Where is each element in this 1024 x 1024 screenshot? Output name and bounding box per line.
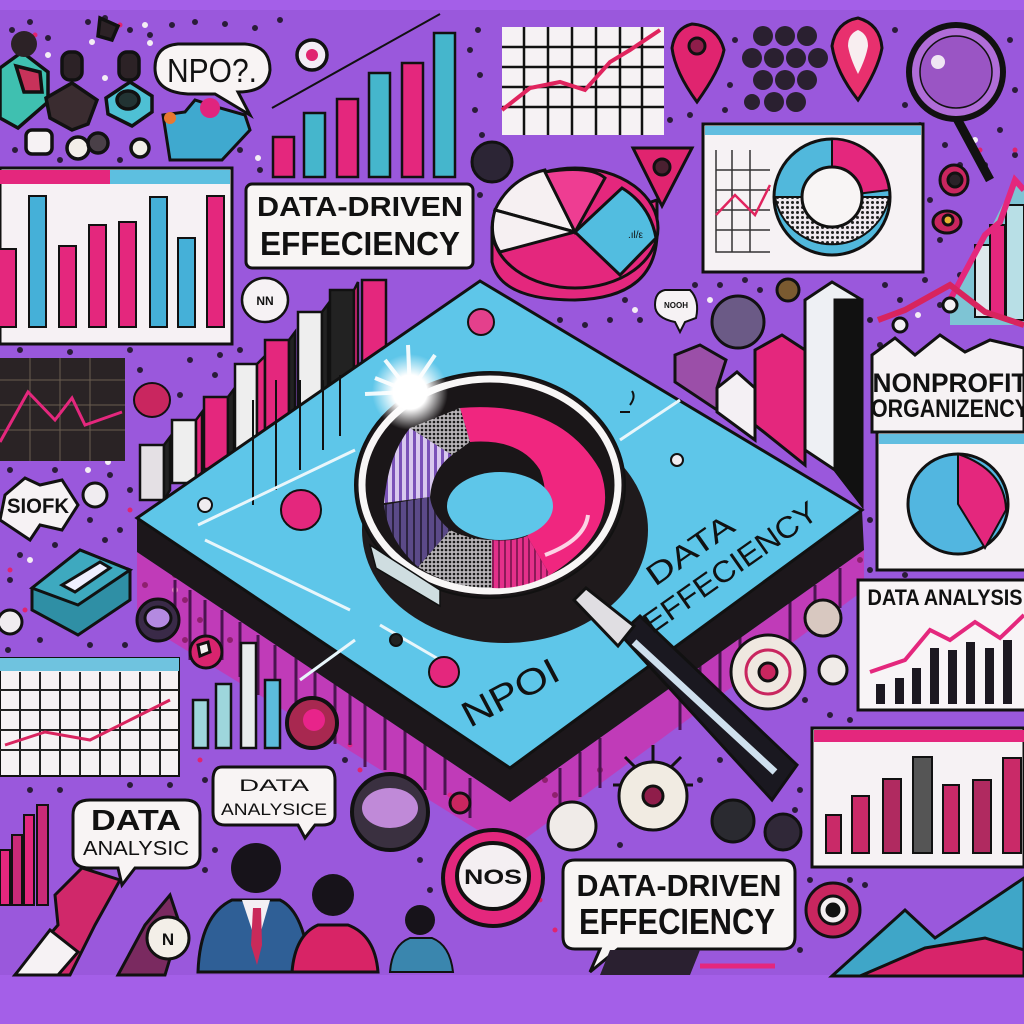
bar chart: left panel (0, 168, 232, 344)
speech bubble: NPO? (155, 44, 270, 115)
icon: blue splash (163, 98, 250, 160)
platform: side shadow (137, 510, 864, 802)
icon: sparkle (365, 345, 448, 430)
icon: brain scribble (712, 296, 764, 348)
speech bubble: NOOH: NOOH (664, 301, 688, 310)
platform: cyan top (137, 281, 862, 768)
icon: eye doodles (933, 165, 968, 233)
icon: teal box (32, 550, 130, 635)
panel: donut dashboard (703, 124, 923, 272)
bar chart: top rising bars (272, 14, 455, 177)
speech bubble: SIOFK (0, 478, 78, 540)
rim side highlight (370, 545, 440, 606)
bar chart: isometric right of platform (675, 282, 862, 505)
label: DATA-DRIVEN EFFECIENCY bottom (563, 860, 795, 972)
icon: compass gear (613, 745, 693, 830)
label: DATA-DRIVEN EFFECIENCY top: EFFECIENCY (260, 225, 460, 262)
handle (574, 588, 797, 800)
speech bubble: DATA ANALYSIC (73, 800, 200, 885)
chart: mountain top right (878, 180, 1024, 332)
pink streaks below platform (137, 550, 864, 850)
label: DATA-DRIVEN EFFECIENCY bottom: DATA-DRIVEN (576, 868, 782, 903)
chart: mountain bottom right (832, 878, 1024, 976)
panel: bottom right bars (812, 728, 1024, 867)
speech bubble: DATA ANALYSICE (213, 767, 335, 838)
bar chart: small lower (193, 643, 280, 748)
platform text: DATA EFFECIENCY: EFFECIENCY (637, 495, 824, 640)
speech bubble: mini NN (242, 278, 288, 322)
callouts: rays and dots on platform (198, 309, 683, 687)
speech bubble: DATA ANALYSICE: ANALYSICE (221, 800, 327, 819)
platform text: DATA EFFECIENCY (616, 465, 824, 640)
label: DATA-DRIVEN EFFECIENCY bottom: EFFECIENCY (579, 901, 775, 942)
icon: target wheel (731, 635, 805, 709)
icon: brown dot (777, 279, 799, 301)
panel: DATA ANALYSIS line chart (858, 580, 1024, 710)
icons: left scattered doodles (0, 483, 222, 668)
icon: glass orb (352, 774, 428, 850)
icon: dark circle lower (287, 698, 337, 748)
icon: dot hexagon cluster (742, 26, 828, 112)
badge: NOS: NOS (464, 866, 522, 889)
icon: map pin crimson (672, 24, 724, 102)
speech bubble: NOOH (655, 290, 697, 332)
icons: bottom center doodles (450, 600, 860, 937)
speech bubble: mini NN: NN (256, 294, 274, 308)
pie chart: 3D top: .ıl/ε (628, 230, 644, 241)
icon: pink slider (700, 964, 775, 968)
speech bubble: DATA ANALYSIC: ANALYSIC (83, 838, 189, 860)
icon: dark strip under label (600, 950, 700, 975)
label: DATA-DRIVEN EFFECIENCY top (246, 184, 473, 268)
panel: grid line chart left (0, 658, 179, 776)
speech bubble: DATA ANALYSIC: DATA (91, 805, 181, 837)
line chart: dark mini panel (0, 358, 125, 461)
icon: map pin white (832, 18, 882, 100)
lens rim (355, 372, 625, 598)
magnifying glass (355, 372, 797, 800)
panel: pie card (877, 432, 1024, 570)
lens body (362, 417, 648, 643)
badge: NOS (443, 830, 543, 926)
doodle band: top-left icons (0, 18, 327, 159)
icon: compass and hand (118, 895, 189, 975)
speech bubble: SIOFK: SIOFK (7, 495, 69, 518)
icon: red blot (134, 383, 170, 417)
bar chart: bottom left pink (0, 805, 48, 905)
label: DATA-DRIVEN EFFECIENCY top: DATA-DRIVEN (257, 191, 463, 222)
donut chart in lens (384, 407, 605, 588)
icon: small magnifier top right (909, 25, 1003, 180)
platform text: DATA EFFECIENCY: DATA (640, 508, 741, 593)
icon: business people (198, 843, 453, 972)
platform text: NPOI: NPOI (454, 650, 566, 735)
icon: dark blob near pie (472, 142, 512, 182)
speech bubble: DATA ANALYSICE: DATA (239, 776, 310, 795)
icon: triangle badge (633, 148, 692, 206)
line chart: top grid (502, 27, 664, 135)
pie chart: 3D top (492, 168, 658, 300)
label: NONPROFIT ORGANIZENCY (871, 335, 1024, 432)
bar chart: isometric left of platform (140, 280, 386, 500)
icon: hand left (15, 868, 120, 975)
icon: compass and hand: N (162, 930, 174, 949)
speech bubble: NPO?: NPO?. (167, 52, 257, 89)
